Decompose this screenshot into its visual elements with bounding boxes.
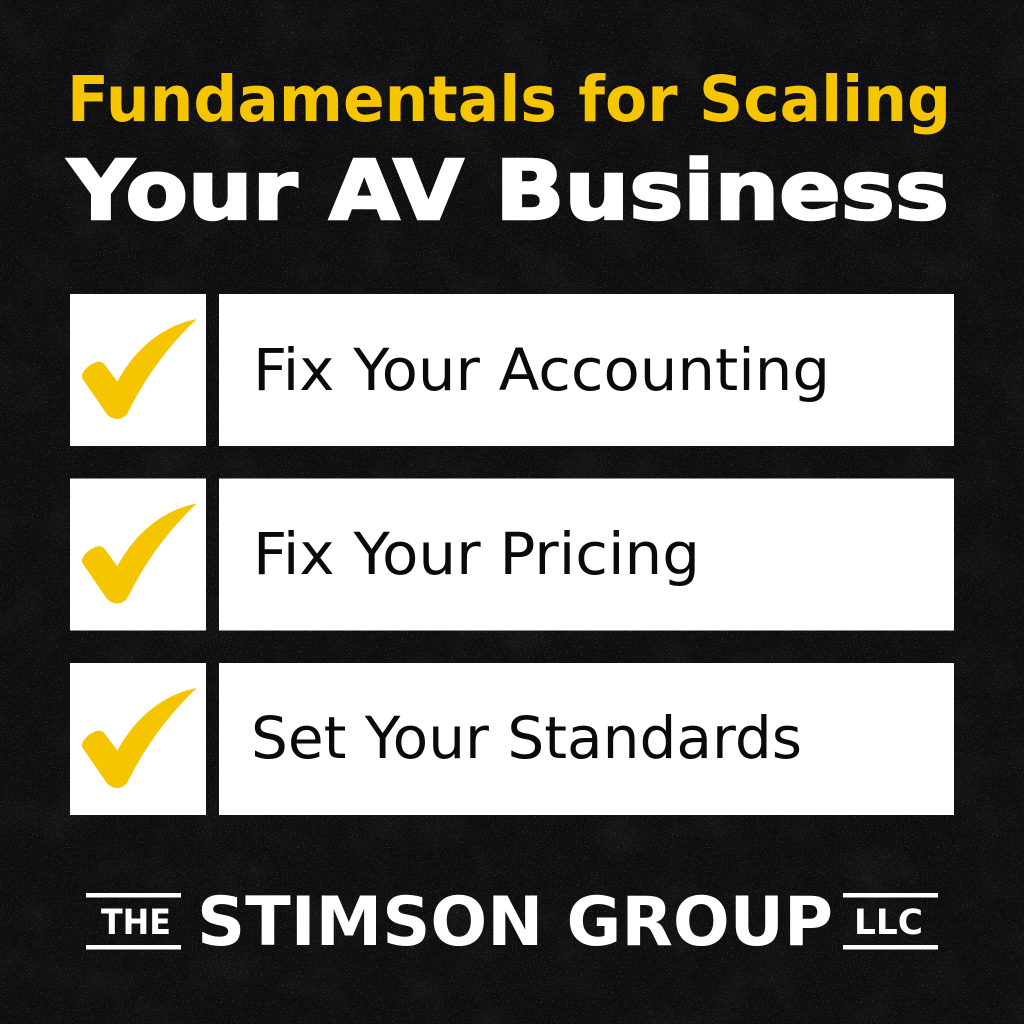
- logo: THE block: [86, 893, 181, 950]
- label text: Fix Your Accounting: [253, 336, 830, 404]
- label panel: [219, 663, 954, 815]
- logo: LLC block: LLC: [854, 903, 923, 943]
- checklist item: Fix Your Accounting: [70, 294, 954, 446]
- title line 2: Your AV Business: [67, 144, 949, 239]
- checkbox panel: [70, 294, 206, 446]
- checklist item: Set Your Standards: [70, 663, 954, 815]
- label text: Fix Your Pricing: [253, 520, 700, 588]
- label panel: [219, 294, 954, 446]
- logo: LLC block: [843, 893, 938, 950]
- icon: yellow check mark: [82, 688, 197, 788]
- checkbox panel: [70, 478, 206, 630]
- logo: THE block: THE: [101, 903, 171, 943]
- title line 1: Fundamentals for Scaling: [67, 63, 951, 136]
- label text: Set Your Standards: [251, 704, 802, 772]
- logo: STIMSON GROUP wordmark: STIMSON GROUP: [197, 883, 833, 962]
- title: [67, 63, 951, 239]
- checklist item: Fix Your Pricing: [70, 478, 954, 630]
- logo: The Stimson Group LLC: [86, 883, 938, 962]
- icon: yellow check mark: [82, 504, 197, 604]
- checkbox panel: [70, 663, 206, 815]
- icon: yellow check mark: [82, 319, 197, 419]
- label panel: [219, 478, 954, 630]
